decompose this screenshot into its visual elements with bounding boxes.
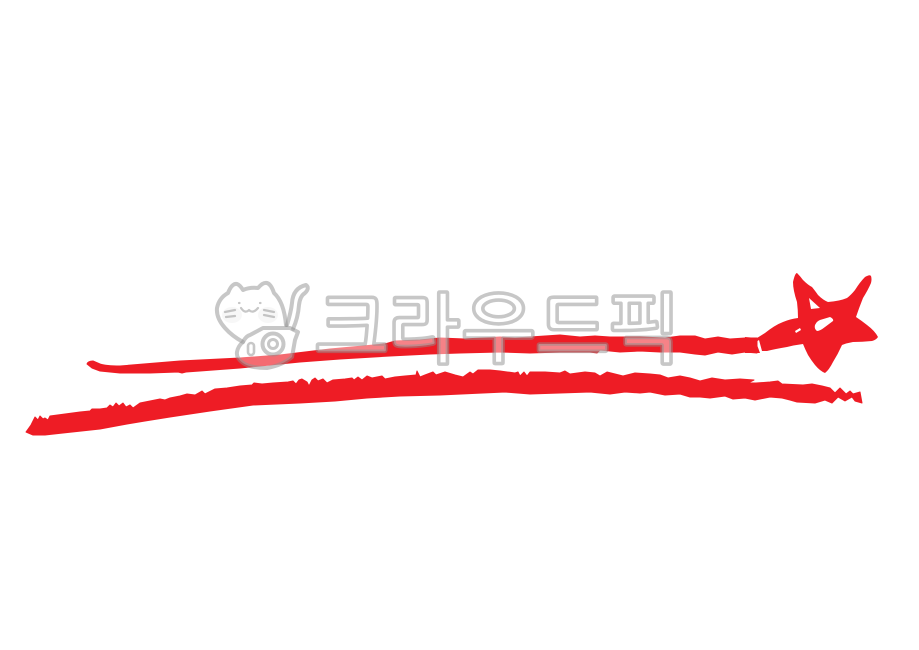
watermark: brand lettering [316, 292, 680, 368]
watermark: cat with camera logo [217, 283, 308, 368]
camera lens centre [268, 340, 278, 348]
camera lens [262, 334, 284, 354]
cat tail [287, 285, 308, 329]
camera side grip [248, 343, 254, 355]
lower red brush stroke [26, 370, 862, 435]
watermark: brand lettering: 드 [537, 293, 608, 368]
upper red brush stroke [87, 335, 757, 373]
cat head and body outline [217, 283, 286, 342]
watermark: brand lettering: 픽 [609, 292, 680, 368]
camera body [237, 328, 298, 368]
cat cheeks [222, 307, 278, 323]
watermark: brand lettering: 크 [316, 293, 387, 368]
watermark: brand lettering: 우 [463, 292, 534, 368]
cat face [225, 303, 274, 317]
red hand-drawn star [745, 273, 878, 373]
watermark: brand lettering: 라 [388, 292, 460, 368]
